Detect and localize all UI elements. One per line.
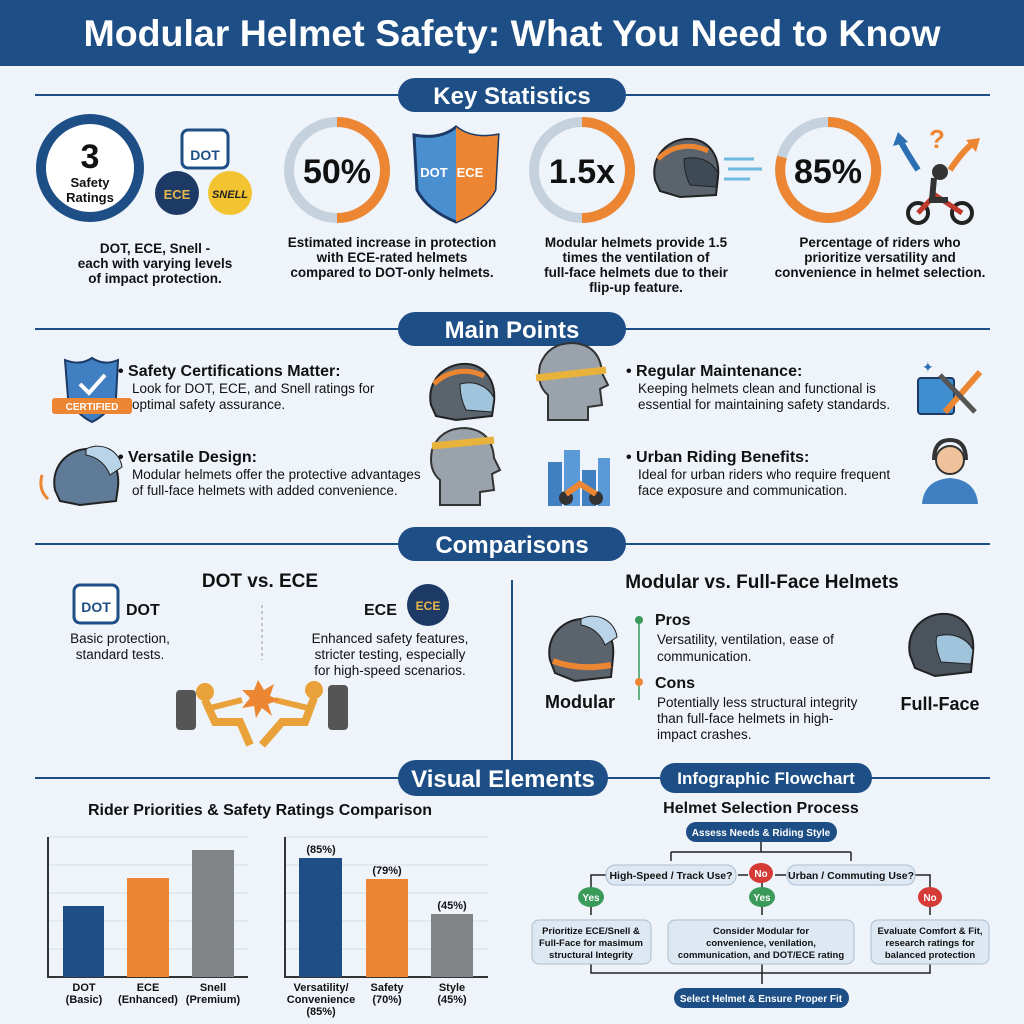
icon: DOT badge <box>74 585 118 623</box>
panel: Modular vs Full-Face: Modular <box>545 692 615 712</box>
heading: Main Points: Main Points <box>445 317 579 344</box>
flowchart: structural Integrity <box>549 950 634 961</box>
icon: rider with arrows: ? <box>929 124 945 154</box>
flowchart: Urban / Commuting Use? <box>788 870 914 882</box>
panel: DOT vs ECE: DOT <box>126 602 160 619</box>
flowchart: Helmet Selection Process <box>663 800 859 817</box>
panel: DOT vs ECE <box>70 571 468 745</box>
stat: 3 safety ratings: of impact protection. <box>88 271 222 286</box>
bar chart: safety ratings: Snell <box>200 982 226 994</box>
flowchart: Prioritize ECE/Snell & <box>542 926 640 937</box>
panel: Modular vs Full-Face: Cons <box>655 675 695 692</box>
point: Regular Maintenance: • Regular Maintenance: <box>626 363 802 380</box>
panel: DOT vs ECE: for high-speed scenarios. <box>314 663 466 678</box>
flowchart: Yes <box>753 893 771 904</box>
bar chart: rider priorities <box>285 837 488 1018</box>
heading: Main Points <box>35 312 990 346</box>
flowchart: High-Speed / Track Use? <box>609 870 733 882</box>
panel: DOT vs ECE: Basic protection, <box>70 631 170 646</box>
stat: 85%: prioritize versatility and <box>804 250 956 265</box>
flowchart: balanced protection <box>885 950 975 961</box>
flowchart: Evaluate Comfort & Fit, <box>877 926 983 937</box>
point: Urban Riding Benefits: Ideal for urban riders who require frequent <box>638 467 890 482</box>
point: Safety Certifications: optimal safety assurance. <box>132 397 285 412</box>
stat: 85%: 85% <box>794 153 862 191</box>
stat: 50%: compared to DOT-only helmets. <box>290 265 494 280</box>
bar chart: safety ratings: DOT <box>72 982 96 994</box>
title: Modular Helmet Safety: What You Need to Know <box>83 12 941 54</box>
icon: helmet with airflow <box>654 139 762 197</box>
flowchart: No <box>923 893 937 904</box>
point: Versatile Design: of full-face helmets with added convenience. <box>132 483 398 498</box>
heading: Comparisons: Comparisons <box>435 532 589 559</box>
bar chart: rider priorities: Versatility/ <box>293 982 349 994</box>
icon: ECE badge: ECE <box>164 187 191 202</box>
flowchart <box>532 800 989 1008</box>
stat: 3 safety ratings: Ratings <box>66 190 114 205</box>
stat: 3 safety ratings: DOT, ECE, Snell - <box>100 241 210 256</box>
icon: city with rider <box>548 450 610 506</box>
icon: ECE badge <box>155 171 199 215</box>
icon: Snell badge: SNELL <box>212 189 248 201</box>
point: Urban Riding Benefits: face exposure and communication. <box>638 483 847 498</box>
chart title: Rider Priorities & Safety Ratings Comparison <box>88 802 432 819</box>
icon: ECE badge: ECE <box>416 599 440 613</box>
point: Versatile Design: • Versatile Design: <box>118 449 257 466</box>
bar chart: rider priorities: (45%) <box>437 994 467 1006</box>
stat: 1.5x: Modular helmets provide 1.5 <box>545 235 728 250</box>
flowchart: convenience, venilation, <box>706 938 816 949</box>
bar chart: rider priorities: (85%) <box>306 844 336 856</box>
stat: 1.5x <box>534 122 762 295</box>
point: Regular Maintenance: Keeping helmets clean and functional is <box>638 381 876 396</box>
flowchart: Assess Needs & Riding Style <box>692 828 831 839</box>
flowchart: research ratings for <box>885 938 975 949</box>
stat: 3 safety ratings <box>41 119 252 286</box>
icon: headset person <box>922 440 978 504</box>
icon: rider with arrows <box>893 124 980 223</box>
heading: Comparisons <box>35 527 990 561</box>
bar chart: safety ratings: ECE <box>137 982 159 994</box>
panel: Modular vs Full-Face: Full-Face <box>900 694 980 714</box>
heading: Infographic Flowchart <box>660 763 872 793</box>
heading: Infographic Flowchart: Infographic Flowchart <box>677 769 855 788</box>
bar chart: rider priorities: (79%) <box>372 865 402 877</box>
stat: 50% <box>288 122 498 280</box>
panel: Modular vs Full-Face: than full-face helmets in high- <box>657 711 833 726</box>
bar chart: rider priorities: Safety <box>370 982 404 994</box>
icon: crash test dummies <box>176 680 348 745</box>
icon: certified shield: CERTIFIED <box>66 402 118 413</box>
heading: Visual Elements: Visual Elements <box>411 766 595 793</box>
icon: head tape <box>536 343 608 420</box>
bar chart: safety ratings <box>48 837 248 1006</box>
bar chart: rider priorities: Convenience <box>287 994 355 1006</box>
icon: flip-up helmet <box>41 446 122 505</box>
flowchart: Select Helmet & Ensure Proper Fit <box>680 994 843 1005</box>
stat: 50%: Estimated increase in protection <box>288 235 496 250</box>
heading: Key Statistics: Key Statistics <box>433 83 591 110</box>
point: Regular Maintenance: essential for maintaining safety standards. <box>638 397 890 412</box>
title <box>0 0 1024 66</box>
heading: Visual Elements <box>35 760 990 796</box>
panel: DOT vs ECE: standard tests. <box>76 647 164 662</box>
point: Urban Riding Benefits: • Urban Riding Benefits: <box>626 449 809 466</box>
panel: DOT vs ECE: stricter testing, especially <box>315 647 466 662</box>
flowchart: Full-Face for masimum <box>539 938 643 949</box>
heading: Key Statistics <box>35 78 990 112</box>
icon: tools box: ✦ <box>922 359 934 375</box>
icon: full-face helmet <box>909 614 973 676</box>
panel: Modular vs Full-Face: Versatility, ventilation, ease of <box>657 632 834 647</box>
icon: DOT/ECE shield: ECE <box>457 165 484 180</box>
bar chart: rider priorities: (85%) <box>306 1006 336 1018</box>
stat: 1.5x: times the ventilation of <box>562 250 710 265</box>
point: Safety Certifications: Look for DOT, ECE, and Snell ratings for <box>132 381 375 396</box>
stat: 3 safety ratings: Safety <box>70 175 110 190</box>
panel: DOT vs ECE: ECE <box>364 602 397 619</box>
bar chart: rider priorities: Style <box>439 982 465 994</box>
stat: 3 safety ratings: 3 <box>81 138 99 176</box>
icon: helmet <box>430 364 494 420</box>
icon: head measuring <box>431 428 500 505</box>
icon: DOT/ECE shield <box>414 127 498 222</box>
point: Safety Certifications: • Safety Certifications Matter: <box>118 363 341 380</box>
icon: Snell badge <box>208 171 252 215</box>
icon: tools box <box>918 359 980 414</box>
panel: Modular vs Full-Face: communication. <box>657 649 752 664</box>
panel: Modular vs Full-Face: Potentially less structural integrity <box>657 695 858 710</box>
stat: 50%: with ECE-rated helmets <box>316 250 467 265</box>
flowchart: No <box>754 869 768 880</box>
panel: Modular vs Full-Face: Modular vs. Full-Face Helmets <box>625 572 899 593</box>
icon: modular helmet <box>549 616 617 681</box>
icon: DOT badge: DOT <box>81 599 111 615</box>
stat: 1.5x: full-face helmets due to their <box>544 265 729 280</box>
point: Versatile Design: Modular helmets offer the protective advantages <box>132 467 421 482</box>
panel: DOT vs ECE: Enhanced safety features, <box>312 631 468 646</box>
bar chart: safety ratings: (Premium) <box>186 994 241 1006</box>
stat: 3 safety ratings: each with varying levels <box>78 256 232 271</box>
icon: DOT/ECE shield: DOT <box>420 165 448 180</box>
icon: DOT badge <box>182 130 228 168</box>
flowchart: communication, and DOT/ECE rating <box>678 950 844 961</box>
panel: Modular vs Full-Face <box>545 572 980 742</box>
point: Safety Certifications <box>52 358 494 422</box>
point: Urban Riding Benefits <box>548 440 978 506</box>
point: Versatile Design <box>41 428 500 505</box>
bar chart: safety ratings: (Basic) <box>66 994 103 1006</box>
bar chart: safety ratings: (Enhanced) <box>118 994 178 1006</box>
bar chart: rider priorities: (70%) <box>372 994 402 1006</box>
point: Regular Maintenance <box>536 343 980 420</box>
panel: Modular vs Full-Face: impact crashes. <box>657 727 752 742</box>
icon: ECE badge <box>407 584 449 626</box>
panel: DOT vs ECE: DOT vs. ECE <box>202 571 318 592</box>
stat: 1.5x: flip-up feature. <box>589 280 683 295</box>
stat: 1.5x: 1.5x <box>549 153 615 191</box>
stat: 50%: 50% <box>303 153 371 191</box>
flowchart: Consider Modular for <box>713 926 809 937</box>
stat: 85%: convenience in helmet selection. <box>775 265 985 280</box>
flowchart: Yes <box>582 893 600 904</box>
icon: DOT badge: DOT <box>190 147 220 163</box>
stat: 85%: Percentage of riders who <box>799 235 961 250</box>
icon: certified shield <box>52 358 132 422</box>
stat: 85% <box>775 122 985 280</box>
bar chart: rider priorities: (45%) <box>437 900 467 912</box>
panel: Modular vs Full-Face: Pros <box>655 612 691 629</box>
